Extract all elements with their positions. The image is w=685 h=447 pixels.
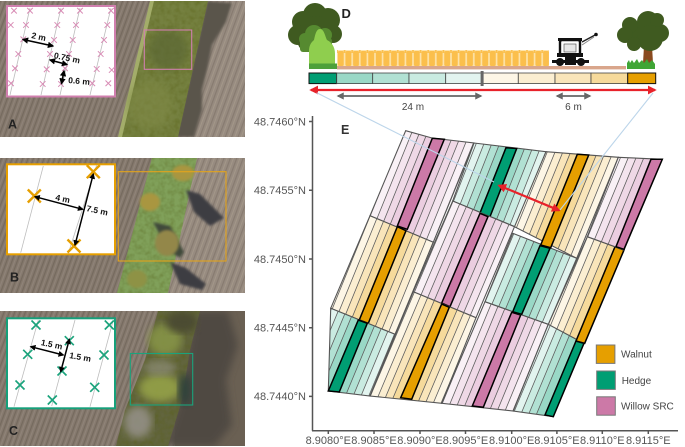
label D: D	[342, 6, 351, 21]
y axis: 48.7445°N	[254, 322, 306, 334]
dimension labels A	[31, 30, 91, 87]
grey arrow: 6 m	[557, 95, 590, 97]
legend: Willow SRC	[621, 402, 674, 412]
legend	[596, 345, 674, 415]
x axis: 8.9105°E	[534, 435, 580, 447]
y axis	[254, 116, 312, 431]
photo B: aerial view of walnut strip	[0, 158, 245, 293]
dimension labels C: 1.5 m	[69, 350, 92, 364]
y axis: 48.7460°N	[254, 116, 306, 128]
label A: A	[8, 118, 17, 132]
parcel: willow bottom	[441, 301, 548, 412]
x axis	[306, 431, 678, 447]
panel D: cross-section of alley with crop, harvester and trees	[288, 3, 669, 113]
grey arrow: 24 m	[338, 95, 481, 97]
x axis: 8.9080°E	[306, 435, 351, 447]
inset A: willow planting scheme	[7, 6, 115, 96]
parcel: hedge bottom right	[512, 325, 584, 418]
walnut tree markers	[28, 165, 100, 252]
x axis: 8.9110°E	[580, 435, 625, 447]
dimension label 6 m: 6 m	[565, 102, 582, 113]
x axis: 8.9095°E	[443, 435, 488, 447]
dimension label 24 m: 24 m	[402, 102, 424, 113]
dimension labels A: 0.6 m	[68, 75, 91, 87]
parcel: walnut second row left	[330, 215, 434, 334]
x axis: 8.9100°E	[489, 435, 534, 447]
icon: walnut tree on right	[617, 11, 669, 69]
inset B: walnut planting scheme	[7, 164, 115, 254]
y axis: 48.7450°N	[254, 254, 306, 266]
panel A: willow aerial photo with planting inset	[0, 1, 245, 137]
dimension labels B: 4 m	[55, 192, 71, 205]
parcel: hedge bottom left	[327, 308, 395, 397]
dimension labels B	[55, 192, 109, 218]
legend: Hedge	[622, 376, 652, 387]
red arrow: alley width on map	[499, 186, 559, 210]
photo B selection rectangle	[118, 172, 226, 261]
dimension arrows A	[23, 40, 67, 84]
inset C: hedge planting scheme	[7, 318, 115, 408]
panel C: hedge aerial photo with planting inset	[0, 311, 245, 446]
soil line	[337, 66, 626, 69]
parcel: walnut second row right	[548, 236, 625, 344]
willow tree markers	[8, 8, 114, 87]
panel B: walnut aerial photo with planting inset	[0, 158, 245, 293]
parcel: willow second row	[414, 200, 515, 318]
zoom connector lines from D to E	[317, 93, 653, 210]
x axis: 8.9090°E	[397, 435, 443, 447]
photo A selection rectangle	[144, 30, 192, 69]
x axis: 8.9115°E	[626, 435, 671, 447]
parcel: walnut top	[514, 151, 619, 258]
label B: B	[10, 270, 19, 284]
parcel: willow top right	[586, 156, 664, 251]
label C: C	[9, 424, 18, 438]
dimension labels A: 0.75 m	[53, 50, 81, 66]
dimension labels A: 2 m	[31, 30, 47, 43]
y axis: 48.7455°N	[254, 185, 306, 197]
icon: combine harvester	[552, 33, 598, 66]
icon: hedge and willow trees on left	[288, 3, 342, 69]
photo C: aerial view of hedge strip	[0, 311, 245, 446]
red arrow: full width	[311, 89, 655, 91]
panel E: map of strips	[254, 93, 682, 447]
dimension arrows C	[31, 339, 69, 372]
legend: Walnut	[621, 350, 652, 360]
dimension labels C: 1.5 m	[40, 337, 64, 352]
parcel: hedge top	[452, 142, 547, 226]
x axis: 8.9085°E	[351, 435, 397, 447]
photo C selection rectangle	[130, 354, 193, 405]
y axis: 48.7440°N	[254, 391, 306, 403]
strip bar with gradient segments	[309, 71, 656, 86]
parcel: willow top left	[369, 130, 475, 243]
photo A: aerial view of willow strip	[0, 1, 245, 137]
dimension arrows B	[35, 174, 93, 245]
dimension labels C	[40, 337, 92, 364]
parcel: hedge second row	[484, 232, 577, 324]
hedge shrub markers	[16, 320, 114, 404]
dimension labels B: 7.5 m	[86, 203, 109, 218]
crop: wheat row	[337, 50, 549, 66]
label E: E	[341, 123, 349, 137]
parcel: walnut bottom	[370, 292, 477, 404]
